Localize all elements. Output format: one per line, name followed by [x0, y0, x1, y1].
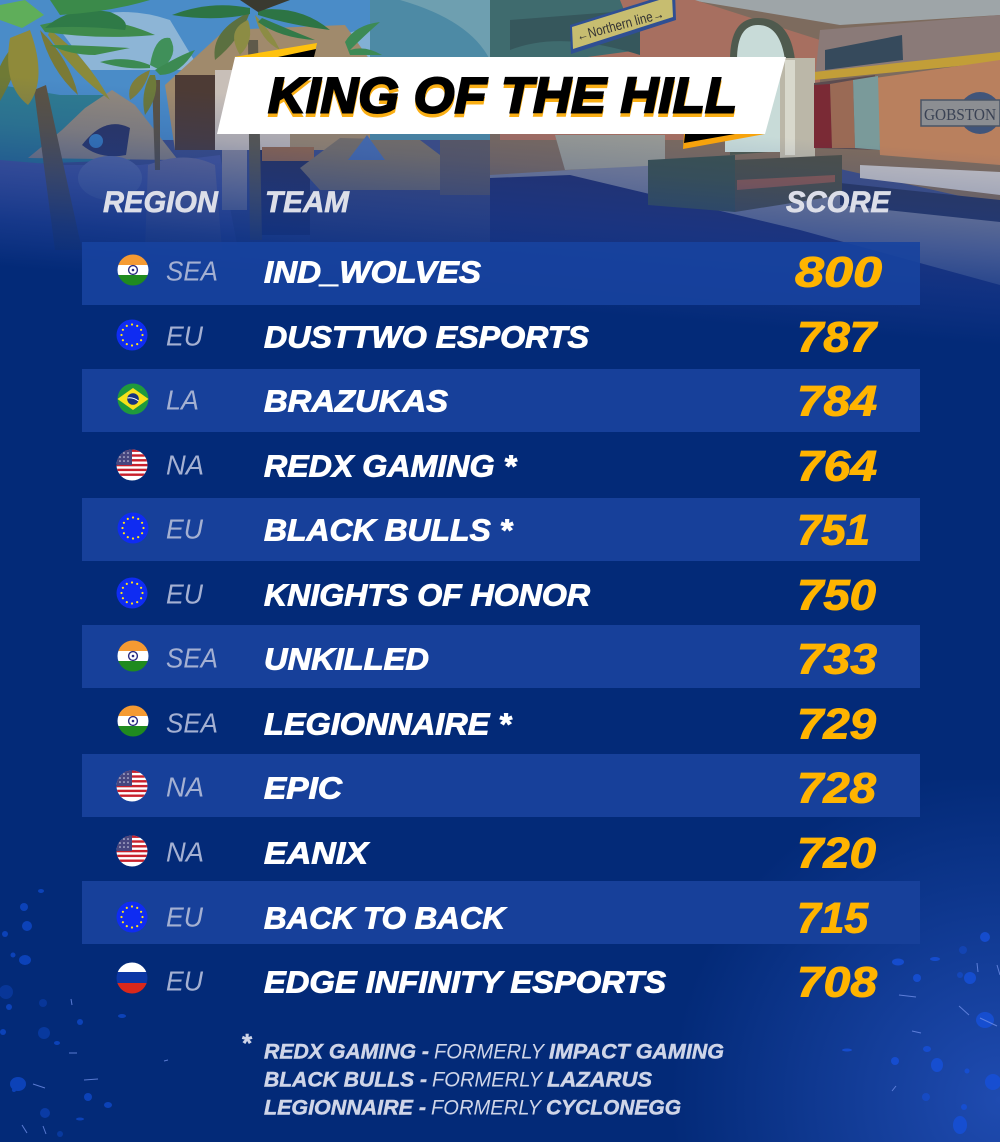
- scene fade: [0, 0, 1000, 350]
- wall brick band and yellow stripe: [815, 15, 1000, 78]
- row 1: IND_WOLVES: [264, 254, 481, 290]
- back wall arch: [370, 0, 500, 140]
- bench block: [648, 155, 735, 212]
- row 11: [82, 881, 920, 944]
- row 9: 728: [797, 764, 876, 812]
- row 10: EANIX: [264, 836, 371, 870]
- row 2: DUSTTWO ESPORTS: [264, 320, 589, 354]
- distant hut: [28, 90, 178, 160]
- palm tree centre: [172, 0, 382, 240]
- tropical hut building: [165, 25, 370, 150]
- row 8: 729: [797, 700, 876, 748]
- title accent: bottom-right: [683, 134, 765, 149]
- row 8: LEGIONNAIRE *: [264, 706, 513, 742]
- row 2: EU: [166, 320, 203, 352]
- spark streaks: [22, 963, 1000, 1134]
- row 12: 708: [797, 958, 877, 1006]
- footnote: *: [241, 1028, 253, 1058]
- pillar: [780, 58, 815, 158]
- title text: KING OF THE HILL: [268, 68, 737, 124]
- row 6: KNIGHTS OF HONOR: [264, 578, 591, 612]
- glow: bottom-right: [600, 780, 1000, 1142]
- row 12: [116, 958, 877, 1006]
- row 3: LA: [166, 384, 199, 416]
- station sign: gobston: [921, 92, 1000, 134]
- row 4: [116, 442, 877, 490]
- sign: northern line: ←Northern line→: [575, 5, 666, 44]
- particles: bottom-right: [842, 932, 1000, 1134]
- footnote: BLACK BULLS -: [264, 1068, 427, 1092]
- row 12: EU: [166, 966, 203, 996]
- row 9: [82, 754, 920, 817]
- row 6: EU: [166, 578, 203, 610]
- column headers: TEAM: [265, 186, 350, 219]
- row 4: REDX GAMING *: [264, 448, 518, 484]
- column headers: [103, 186, 891, 219]
- footnote: FORMERLY: [434, 1040, 546, 1064]
- footnote: FORMERLY: [432, 1068, 544, 1092]
- row 10: 720: [797, 830, 876, 878]
- window arch: [730, 18, 795, 155]
- palm tree left: [0, 0, 155, 250]
- row 6: [116, 572, 876, 620]
- distant foliage: [0, 85, 130, 165]
- row 1: 800: [795, 248, 882, 296]
- row 4: 764: [797, 442, 877, 490]
- platform: [490, 165, 1000, 345]
- row 5: [82, 498, 920, 561]
- row 10: NA: [166, 836, 204, 868]
- row 8: [117, 700, 876, 748]
- title banner: [217, 43, 786, 149]
- title accent: top-left: [234, 43, 317, 57]
- row 3: 784: [797, 378, 877, 426]
- hanging black sign: [825, 35, 903, 70]
- row 3: BRAZUKAS: [264, 384, 448, 418]
- title text: KING OF THE HILL: [268, 71, 737, 127]
- row 9: EPIC: [264, 770, 343, 806]
- row 1: [82, 242, 920, 305]
- row 2: 787: [797, 314, 878, 362]
- footnote: IMPACT GAMING: [549, 1040, 724, 1064]
- row 5: 751: [797, 506, 870, 554]
- row 7: UNKILLED: [264, 642, 429, 676]
- row 11: EU: [166, 902, 203, 932]
- row 11: 715: [797, 894, 869, 942]
- row 3: [82, 369, 920, 432]
- row 12: EDGE INFINITY ESPORTS: [264, 964, 666, 1000]
- title plate: [217, 57, 786, 134]
- row 9: NA: [166, 772, 204, 802]
- row 7: 733: [797, 636, 877, 684]
- footnote: CYCLONEGG: [546, 1096, 681, 1120]
- row 4: NA: [166, 450, 204, 480]
- footnote: FORMERLY: [431, 1096, 543, 1120]
- row 6: 750: [797, 572, 876, 620]
- footnote: LEGIONNAIRE -: [264, 1096, 426, 1120]
- row 1: SEA: [166, 256, 218, 286]
- column headers: REGION: [103, 186, 219, 219]
- rocks and statue: [0, 155, 240, 260]
- column headers: SCORE: [786, 186, 891, 219]
- footnote: REDX GAMING -: [264, 1040, 429, 1064]
- row 5: BLACK BULLS *: [264, 512, 514, 548]
- palm tree middle: [100, 38, 195, 170]
- jungle sky: [0, 0, 490, 140]
- row 7: SEA: [166, 642, 218, 674]
- row 5: EU: [166, 514, 203, 544]
- row 11: BACK TO BACK: [264, 900, 508, 936]
- dark floor: [490, 175, 1000, 345]
- row 8: SEA: [166, 708, 218, 738]
- row 7: [82, 625, 920, 688]
- particles: bottom-left: [0, 889, 126, 1137]
- footnote: LAZARUS: [547, 1068, 653, 1092]
- footnote: [241, 1028, 724, 1120]
- station wall: [490, 0, 1000, 205]
- row 10: [116, 830, 876, 878]
- posters: [814, 75, 880, 150]
- row 2: [116, 314, 878, 362]
